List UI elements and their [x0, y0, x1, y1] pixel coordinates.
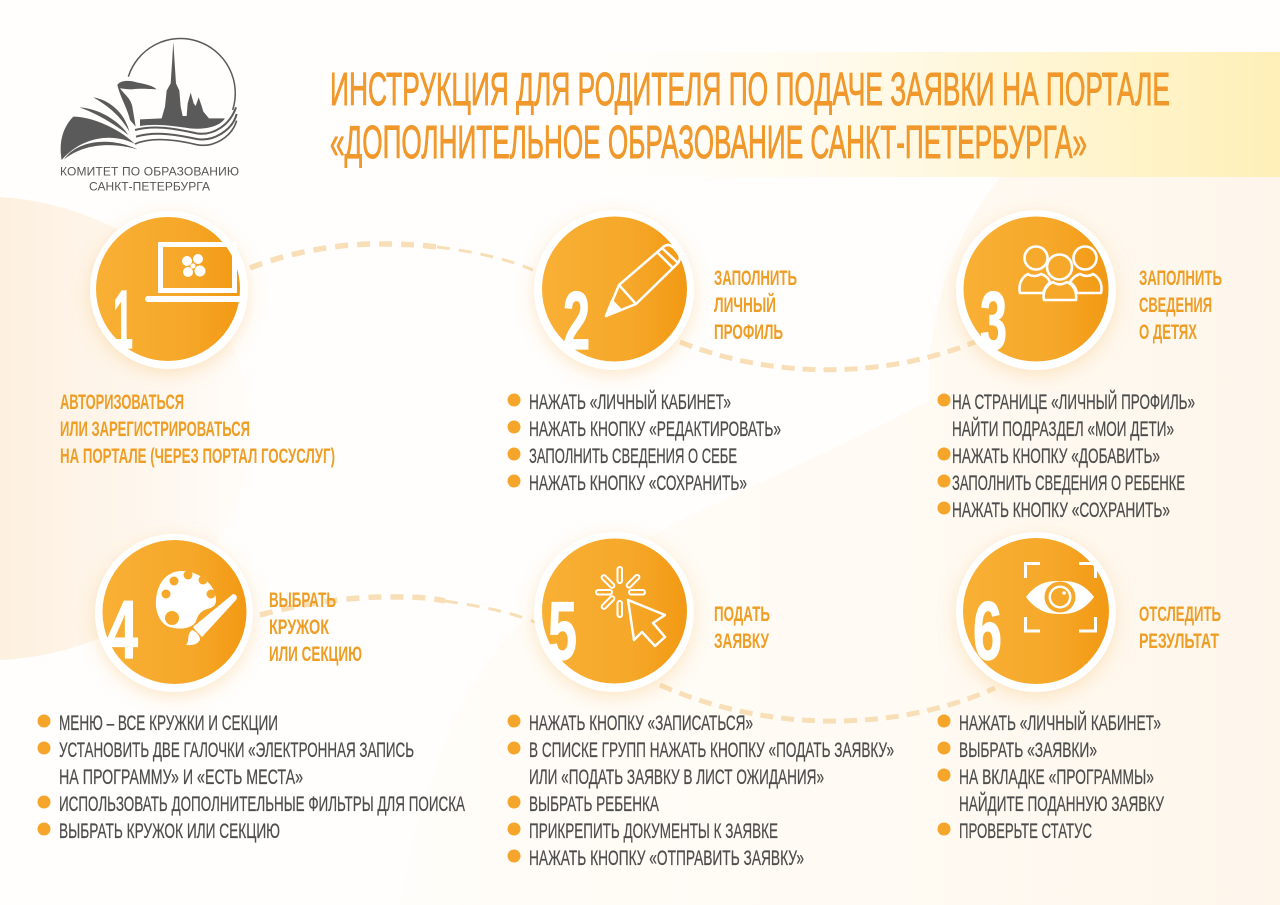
step 5 heading: ЗАЯВКУ	[714, 629, 769, 653]
step 4 heading	[269, 588, 362, 666]
step 6 list: НАЖАТЬ «ЛИЧНЫЙ КАБИНЕТ»	[959, 710, 1161, 735]
step 3 heading: СВЕДЕНИЯ	[1139, 293, 1212, 317]
step 5 list: ИЛИ «ПОДАТЬ ЗАЯВКУ В ЛИСТ ОЖИДАНИЯ»	[529, 765, 824, 789]
number 5: 5	[548, 584, 577, 677]
step 1 text: ИЛИ ЗАРЕГИСТРИРОВАТЬСЯ	[60, 417, 250, 441]
step 5 list: НАЖАТЬ КНОПКУ «ЗАПИСАТЬСЯ»	[529, 711, 753, 735]
step 3	[938, 210, 1222, 522]
step 5	[508, 532, 894, 870]
step 5 list: ВЫБРАТЬ РЕБЕНКА	[529, 792, 659, 816]
step 3 heading: ЗАПОЛНИТЬ	[1139, 266, 1222, 290]
step 6 list: ВЫБРАТЬ «ЗАЯВКИ»	[959, 738, 1097, 762]
step 1 circle	[90, 211, 248, 369]
step 3 heading	[1139, 266, 1222, 344]
step 4 heading: ВЫБРАТЬ	[269, 588, 336, 612]
step 2 list: ЗАПОЛНИТЬ СВЕДЕНИЯ О СЕБЕ	[529, 444, 737, 468]
step 6 circle	[956, 532, 1116, 692]
step 6 list: НА ВКЛАДКЕ «ПРОГРАММЫ»	[959, 765, 1154, 789]
logo	[60, 39, 239, 193]
step 3 heading: О ДЕТЯХ	[1139, 320, 1197, 344]
step 2 list: НАЖАТЬ КНОПКУ «РЕДАКТИРОВАТЬ»	[529, 417, 781, 441]
step 6 list: ПРОВЕРЬТЕ СТАТУС	[959, 819, 1092, 843]
icon: laptop	[145, 244, 247, 302]
header band	[480, 52, 1280, 177]
step 2 circle	[534, 210, 694, 370]
icon: cursor click	[596, 567, 665, 646]
step 6 heading: РЕЗУЛЬТАТ	[1139, 629, 1219, 653]
step 2 heading: ЗАПОЛНИТЬ	[714, 266, 797, 290]
step 2 heading: ЛИЧНЫЙ	[714, 292, 776, 317]
step 1 text: НА ПОРТАЛЕ (ЧЕРЕЗ ПОРТАЛ ГОСУСЛУГ)	[60, 444, 335, 468]
step 4 list: ВЫБРАТЬ КРУЖОК ИЛИ СЕКЦИЮ	[59, 819, 280, 843]
step 4 list: УСТАНОВИТЬ ДВЕ ГАЛОЧКИ «ЭЛЕКТРОННАЯ ЗАПИСЬ	[59, 738, 414, 762]
connector 2 to 3	[680, 342, 975, 370]
step 2 list	[508, 389, 781, 495]
number 3: 3	[980, 274, 1007, 367]
step 3 list: НАЖАТЬ КНОПКУ «ДОБАВИТЬ»	[952, 444, 1160, 468]
number 2: 2	[563, 274, 590, 367]
step 1 text: АВТОРИЗОВАТЬСЯ	[60, 390, 184, 414]
step 6 heading	[1139, 602, 1221, 653]
step 6 heading: ОТСЛЕДИТЬ	[1139, 602, 1221, 626]
logo caption: КОМИТЕТ ПО ОБРАЗОВАНИЮ	[60, 164, 239, 178]
step 2 heading	[714, 266, 797, 344]
step 3 circle	[956, 210, 1116, 370]
step 3 list	[938, 389, 1195, 522]
connector 5 to 6	[660, 685, 995, 721]
icon: pencil	[606, 245, 680, 316]
step 2	[508, 210, 797, 495]
step 6	[938, 532, 1221, 843]
title	[330, 63, 1170, 168]
step 4 heading: ИЛИ СЕКЦИЮ	[269, 642, 362, 666]
step 1 text	[60, 390, 335, 468]
step 1: 1	[113, 273, 133, 366]
connector 4 to 5	[260, 597, 535, 622]
connector 1 to 2	[250, 244, 533, 270]
step 5 list: ПРИКРЕПИТЬ ДОКУМЕНТЫ К ЗАЯВКЕ	[529, 819, 778, 843]
step 4 list: МЕНЮ – ВСЕ КРУЖКИ И СЕКЦИИ	[59, 711, 278, 735]
step 1	[60, 211, 335, 468]
icon: people	[1019, 246, 1102, 300]
step 2 list: НАЖАТЬ «ЛИЧНЫЙ КАБИНЕТ»	[529, 389, 731, 414]
step 4 list: НА ПРОГРАММУ» И «ЕСТЬ МЕСТА»	[59, 765, 303, 789]
step 6 list	[938, 710, 1164, 843]
logo caption: САНКТ-ПЕТЕРБУРГА	[89, 180, 210, 194]
step 4 circle	[95, 534, 253, 692]
step 2 heading: ПРОФИЛЬ	[714, 320, 783, 344]
number 6: 6	[973, 584, 1002, 677]
step 2 list: НАЖАТЬ КНОПКУ «СОХРАНИТЬ»	[529, 471, 747, 495]
step 4	[38, 534, 465, 843]
step 5 heading: ПОДАТЬ	[714, 602, 770, 626]
step 5 list	[508, 711, 894, 870]
step 5 list: В СПИСКЕ ГРУПП НАЖАТЬ КНОПКУ «ПОДАТЬ ЗАЯВКУ»	[529, 738, 894, 762]
icon: palette and brush	[156, 570, 237, 645]
step 5 circle	[534, 532, 694, 692]
step 4 heading: КРУЖОК	[269, 615, 330, 639]
step 4 list	[38, 711, 465, 843]
step 6 list: НАЙДИТЕ ПОДАННУЮ ЗАЯВКУ	[959, 791, 1164, 816]
logo emblem	[61, 39, 237, 160]
icon: eye in frame	[1026, 564, 1096, 631]
number 4: 4	[107, 583, 138, 676]
step 5 heading	[714, 602, 770, 653]
step 4 list: ИСПОЛЬЗОВАТЬ ДОПОЛНИТЕЛЬНЫЕ ФИЛЬТРЫ ДЛЯ ПОИСКА	[59, 792, 465, 816]
logo caption	[60, 164, 239, 194]
step 5 list: НАЖАТЬ КНОПКУ «ОТПРАВИТЬ ЗАЯВКУ»	[529, 846, 804, 870]
